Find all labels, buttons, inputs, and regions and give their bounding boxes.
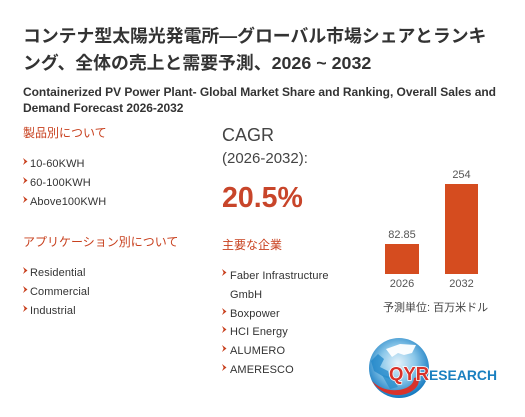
bar label 2032: 2032 bbox=[449, 278, 474, 290]
item: 10-60KWH: 10-60KWH bbox=[30, 158, 85, 170]
list: products bbox=[23, 158, 106, 208]
item: AMERESCO: AMERESCO bbox=[230, 364, 294, 376]
title bbox=[23, 26, 486, 73]
item: Industrial: Industrial bbox=[30, 305, 76, 317]
item: Boxpower: Boxpower bbox=[230, 308, 280, 320]
heading: by application: アプリケーション別について bbox=[23, 235, 178, 249]
item: Commercial: Commercial bbox=[30, 286, 90, 298]
subtitle bbox=[23, 85, 496, 115]
bar value 2032: 254 bbox=[452, 169, 471, 181]
item: Faber Infrastructure GmbH bbox=[222, 269, 329, 301]
logo wordmark: QYR bbox=[389, 363, 429, 384]
title: ング、全体の売上と需要予測、2026 ~ 2032 bbox=[23, 53, 371, 73]
subtitle: Containerized PV Power Plant- Global Market Share and Ranking, Overall Sales and bbox=[23, 85, 496, 99]
item: HCI Energy: HCI Energy bbox=[230, 326, 288, 338]
red swoosh bbox=[372, 377, 419, 395]
bar value 2026: 82.85 bbox=[388, 229, 416, 241]
item: 60-100KWH: 60-100KWH bbox=[30, 177, 91, 189]
bar chart bbox=[383, 169, 488, 314]
item: Faber Infrastructure GmbH: Faber Infrastructure bbox=[230, 270, 329, 282]
CAGR value: 20.5% bbox=[222, 182, 303, 214]
list: applications bbox=[23, 267, 90, 317]
globe bbox=[369, 338, 429, 398]
bar 2026 bbox=[385, 244, 419, 274]
CAGR period: (2026-2032): bbox=[222, 150, 308, 167]
bar label 2026: 2026 bbox=[390, 278, 414, 290]
logo: QYResearch bbox=[369, 338, 497, 398]
heading: key companies: 主要な企業 bbox=[222, 238, 282, 252]
item: Residential: Residential bbox=[30, 267, 86, 279]
subtitle: Demand Forecast 2026-2032 bbox=[23, 101, 183, 115]
logo wordmark suffix: ESEARCH bbox=[429, 367, 497, 383]
unit note: 予測単位: 百万米ドル bbox=[383, 302, 488, 314]
list: companies bbox=[222, 269, 329, 376]
bar 2032 bbox=[445, 184, 478, 274]
title: コンテナ型太陽光発電所―グローバル市場シェアとランキ bbox=[23, 26, 486, 46]
heading: by product: 製品別について bbox=[23, 126, 107, 140]
item: ALUMERO: ALUMERO bbox=[230, 345, 285, 357]
CAGR label: CAGR bbox=[222, 125, 274, 145]
item: Above100KWH: Above100KWH bbox=[30, 196, 106, 208]
item: Faber Infrastructure GmbH: GmbH bbox=[230, 289, 262, 301]
